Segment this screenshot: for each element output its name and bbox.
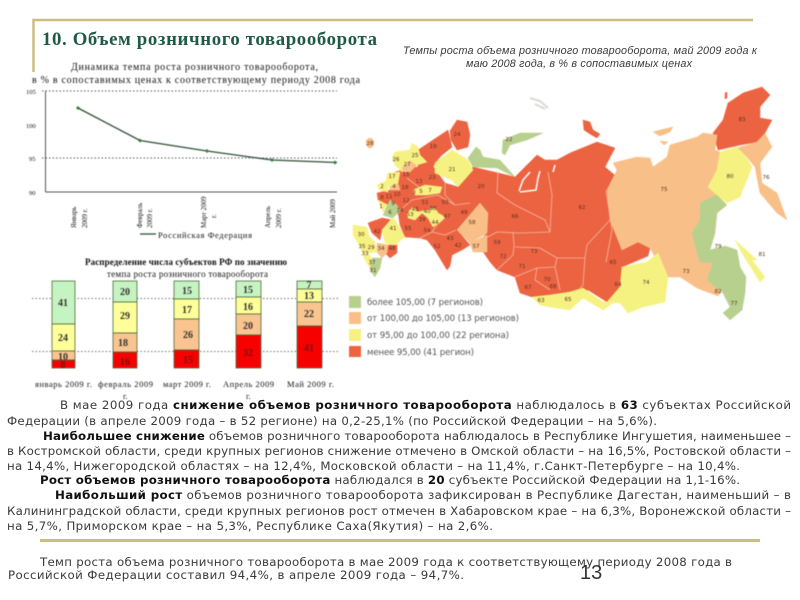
map: region numbers: 20 [477, 184, 485, 190]
map: region numbers: 72 [499, 254, 507, 260]
map: region numbers: 42 [454, 243, 462, 249]
map: region numbers: 71 [518, 264, 526, 270]
legend: 100 to 105: от 100,00 до 105,00 (13 регионов) [367, 314, 519, 324]
map: region numbers: 2 [380, 184, 384, 190]
line chart category labels: Февраль [136, 203, 144, 228]
bar category labels: Апрель 2009 [223, 379, 274, 389]
line chart axis values: 90 [29, 190, 36, 197]
map: arctic islands [530, 98, 548, 109]
body text: Наибольшее снижение объемов розничного товарооборота наблюдалось в Республике Ингушетия, наименьшее – [43, 429, 791, 443]
map: region numbers: 49 [460, 210, 468, 216]
map: region numbers: 51 [421, 200, 429, 206]
map: region numbers: 57 [472, 244, 480, 250]
line chart category labels: 2009 г. [275, 208, 283, 228]
body text: на 14,4%, Нижегородской областях – на 12,4%, Московской области – на 11,4%, г.Санкт-Петербурге – на 10,4%. [7, 459, 740, 473]
map: region numbers: 68 [549, 284, 557, 290]
line chart category labels: г. [210, 214, 218, 218]
map: region numbers: 23 [428, 175, 436, 181]
map: region numbers: 39 [418, 217, 426, 223]
map: region numbers: 18 [401, 185, 409, 191]
bar value labels: 24 [58, 333, 68, 344]
line chart axis values: 105 [26, 89, 36, 96]
bar chart gridlines [32, 298, 340, 352]
map: region numbers: 14 [396, 208, 404, 214]
bar: май [297, 281, 322, 368]
title: 10. Объем розничного товарооборота [42, 29, 378, 50]
line chart category labels: Май 2009 [329, 199, 337, 228]
legend: 95 to 100: от 95,00 до 100,00 (22 региона) [367, 331, 509, 341]
bar value labels: 7 [306, 280, 312, 291]
footer note [8, 555, 732, 582]
map: region numbers: 59 [493, 240, 501, 246]
map: region numbers: 83 [738, 117, 746, 123]
map: region numbers: 42 [373, 229, 381, 235]
bar: март [174, 281, 199, 368]
map: region numbers: 34 [377, 246, 385, 252]
map: region numbers: 30 [357, 232, 365, 238]
body text: В мае 2009 года снижение объемов розничного товарооборота наблюдалось в 63 субъектах Российской [60, 398, 791, 412]
map: region numbers [357, 117, 770, 307]
map: region numbers: 43 [411, 207, 419, 213]
bar value labels: 8 [60, 360, 66, 371]
map: region numbers: 28 [366, 141, 374, 147]
map: region numbers: 15 [402, 172, 410, 178]
map: region numbers: 35 [358, 244, 366, 250]
map: region numbers: 10 [393, 192, 401, 198]
bar value labels: 32 [243, 348, 253, 359]
bar value labels: 20 [243, 321, 253, 332]
map: region numbers: 75 [660, 187, 668, 193]
bar category labels: март 2009 г. [163, 379, 211, 389]
map subtitle: Темпы роста объема розничного товарооборота, май 2009 года к [403, 45, 758, 57]
body text: Рост объемов розничного товарооборота наблюдался в 20 субъекте Российской Федерации на 1,1-16%. [40, 473, 740, 487]
page number: 13 [580, 562, 602, 584]
line chart category labels: Апрель [264, 206, 272, 228]
map: region numbers: 11 [385, 194, 393, 200]
legend: below 95: менее 95,00 (41 регион) [367, 348, 474, 358]
bar category labels: февраль 2009 [98, 379, 153, 389]
footer note: Российской Федерации составил 94,4%, в апреле 2009 года – 94,7%. [8, 568, 464, 582]
map: regions above 105 (green) [370, 133, 746, 320]
map: region numbers: 3 [412, 190, 416, 196]
map: region numbers: 37 [368, 260, 376, 266]
bar: апрель [236, 281, 261, 368]
title frame [34, 20, 753, 72]
stacked bar chart [32, 257, 340, 401]
map: region numbers: 31 [369, 268, 377, 274]
map: region numbers: 76 [762, 175, 770, 181]
line chart category labels: 2009 г. [146, 208, 154, 228]
bar value labels: 15 [183, 355, 193, 366]
map: region numbers: 41 [389, 226, 397, 232]
map: region numbers: 24 [453, 132, 461, 138]
map: region numbers: 27 [403, 162, 411, 168]
map: region numbers: 52 [433, 244, 441, 250]
map: regions 95–100 (yellow) [353, 143, 765, 313]
divider rule [40, 539, 760, 542]
map: region numbers: 53 [406, 212, 414, 218]
map: region numbers: 55 [404, 226, 412, 232]
bar value labels: 26 [183, 330, 193, 341]
bar category labels: г. [123, 391, 128, 401]
bar chart heading: Распределение числа субъектов РФ по значению [85, 257, 287, 267]
bar value labels: 16 [243, 302, 253, 313]
line chart [26, 62, 361, 240]
map: region numbers: 19 [429, 144, 437, 150]
bar value labels [58, 280, 314, 371]
bar chart heading [85, 257, 287, 279]
body text [7, 398, 791, 533]
map: region numbers: 17 [388, 174, 396, 180]
bar category labels [35, 379, 334, 401]
body text: Федерации (в апреле 2009 года – в 52 регионе) на 0,2-25,1% (по Российской Федерации – на 5,6%). [7, 414, 657, 428]
map: region numbers: 7 [428, 188, 432, 194]
choropleth map of Russia [353, 87, 787, 320]
map: region numbers: 22 [505, 137, 513, 143]
map: region numbers: 65 [609, 260, 617, 266]
bar value labels: 20 [120, 287, 130, 298]
bar value labels: 22 [304, 309, 314, 320]
bar category labels: Май 2009 г. [287, 379, 334, 389]
line chart legend: Российская Федерация [158, 230, 252, 240]
map: region numbers: 9 [391, 201, 395, 207]
line chart axes [42, 91, 337, 192]
map: region numbers: 38 [429, 206, 437, 212]
bar value labels: 15 [243, 285, 253, 296]
map: region numbers: 64 [614, 282, 622, 288]
map: region numbers: 73 [530, 249, 538, 255]
map: region numbers: 40 [423, 209, 431, 215]
line chart heading [32, 62, 361, 86]
bar value labels: 18 [118, 338, 128, 349]
map: region numbers: 12 [402, 198, 410, 204]
map: region numbers: 21 [448, 167, 456, 173]
map: region numbers: 54 [423, 228, 431, 234]
map: region numbers: 5 [419, 189, 423, 195]
map: region numbers: 33 [361, 251, 369, 257]
line chart axis values: 95 [29, 156, 36, 163]
map: regions below 95 (red) [368, 87, 772, 302]
map: region numbers: 80 [726, 174, 734, 180]
legend: above 105: более 105,00 (7 регионов) [367, 298, 483, 308]
bar value labels: 41 [58, 298, 68, 309]
bar value labels: 16 [120, 357, 130, 368]
map subtitle [403, 45, 758, 70]
map: region numbers: 62 [578, 205, 586, 211]
map subtitle: маю 2008 года, в % в сопоставимых ценах [466, 58, 693, 70]
map: region numbers: 74 [642, 280, 650, 286]
map: region numbers: 81 [758, 252, 766, 258]
map: region numbers: 6 [388, 210, 392, 216]
map: region numbers: 63 [537, 298, 545, 304]
map: region numbers: 48 [388, 246, 396, 252]
bar value labels: 17 [182, 305, 192, 316]
map: region numbers: 77 [730, 301, 738, 307]
bar chart heading: темпа роста розничного товарооборота [107, 269, 268, 279]
bar value labels: 29 [120, 311, 130, 322]
bar value labels: 13 [304, 291, 314, 302]
bar: январь [52, 281, 75, 368]
body text: Наибольший рост объемов розничного товарооборота зафиксирован в Республике Дагестан, наименьший – в [55, 488, 791, 502]
map: region numbers: 79 [714, 244, 722, 250]
line chart category labels: Январь [70, 207, 78, 228]
line chart heading: Динамика темпа роста розничного товарооборота, [71, 62, 318, 73]
map: region numbers: 4 [392, 184, 396, 190]
map: region numbers: 13 [415, 179, 423, 185]
line series: Российская Федерация [76, 106, 337, 164]
map: region numbers: 47 [443, 214, 451, 220]
map: region numbers: 65 [564, 297, 572, 303]
map: region numbers: 70 [543, 277, 551, 283]
line chart heading: в % в сопоставимых ценах к соответствующему периоду 2008 года [32, 75, 361, 86]
bar: февраль [113, 281, 137, 368]
map: region numbers: 67 [524, 285, 532, 291]
map: region numbers: 73 [682, 269, 690, 275]
bar value labels: 10 [58, 352, 68, 363]
map: region numbers: 25 [411, 153, 419, 159]
bar category labels: г. [246, 391, 251, 401]
map: region numbers: 26 [392, 157, 400, 163]
footer note: Темп роста объема розничного товарооборота в мае 2009 года к соответствующему периоду 2008 года в [39, 555, 732, 569]
bar value labels: 15 [182, 286, 192, 297]
map: region numbers: 1 [379, 204, 383, 210]
body text: Калининградской области, среди крупных регионов рост отмечен в Хабаровском крае – на 6,3%, Воронежской области – [7, 504, 791, 518]
map legend [349, 296, 519, 358]
map: region numbers: 44 [431, 220, 439, 226]
bar category labels: январь 2009 г. [35, 379, 92, 389]
map: region numbers: 66 [511, 214, 519, 220]
map: region numbers: 82 [714, 289, 722, 295]
line chart category labels: 2009 г. [81, 208, 89, 228]
line chart axis values: 100 [26, 123, 36, 130]
map: white gulfs [519, 165, 555, 192]
body text: в Костромской области, среди крупных регионов снижение отмечено в Омской области – на 16,5%, Ростовской области – [7, 444, 791, 458]
body text: на 5,7%, Приморском крае – на 5,3%, Республике Саха(Якутия) – на 2,6%. [7, 519, 493, 533]
map: region numbers: 43 [446, 236, 454, 242]
map: region numbers: 29 [367, 245, 375, 251]
line chart axis values [26, 89, 36, 197]
map: region numbers: 8 [380, 195, 384, 201]
bar value labels: 41 [304, 343, 314, 354]
map: region numbers: 50 [441, 200, 449, 206]
map: regions 100–105 (orange) [366, 127, 787, 296]
map: region borders [398, 172, 612, 290]
map: region numbers: 58 [468, 220, 476, 226]
line chart category labels [70, 196, 337, 228]
line chart category labels: Март 2009 [200, 196, 208, 228]
